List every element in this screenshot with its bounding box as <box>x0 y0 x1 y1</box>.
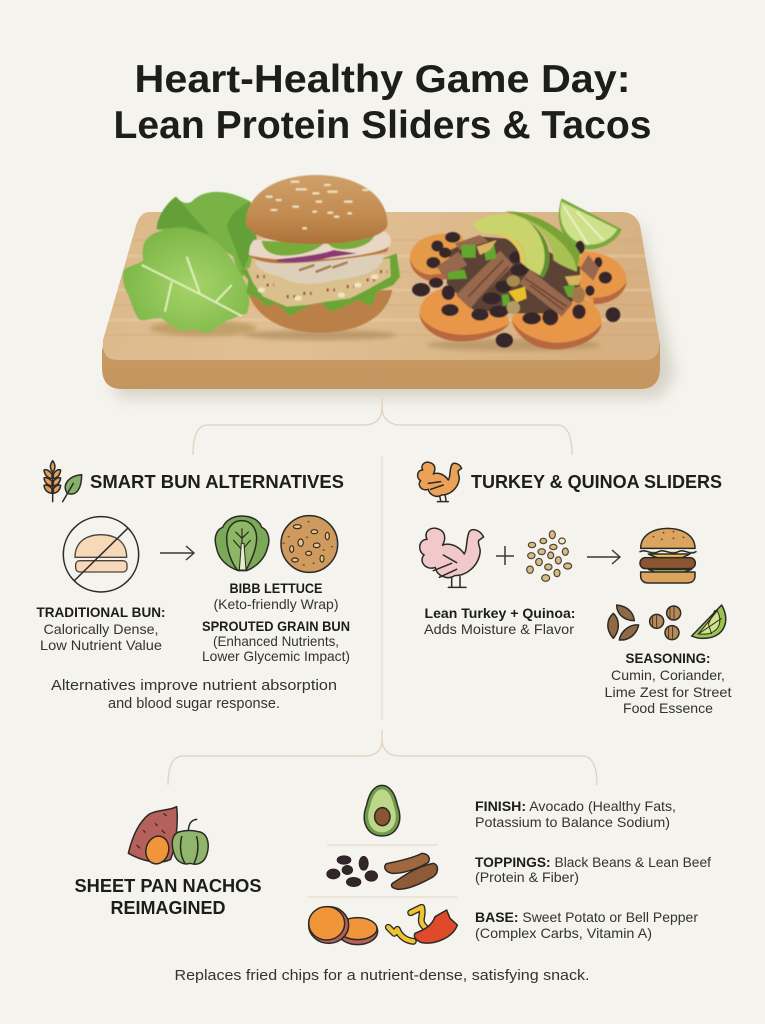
connector: to sheet pan section <box>168 730 597 785</box>
beans <box>412 232 620 348</box>
text: seasoning: Food Essence <box>623 701 713 716</box>
text: bun alternatives: (Enhanced Nutrients, <box>213 634 339 649</box>
icon: pink turkey <box>420 528 484 587</box>
wooden board <box>100 212 660 389</box>
text: finish: Potassium to Balance Sodium) <box>475 814 670 830</box>
lettuce leaf and slider <box>123 175 400 340</box>
text: lean turkey and quinoa <box>424 606 576 637</box>
heading: SMART BUN ALTERNATIVES <box>90 471 344 492</box>
sweet potato slices <box>410 233 480 282</box>
icon: sweet potato slices and peppers <box>309 907 457 945</box>
board shadow <box>110 225 675 398</box>
text: seasoning: Lime Zest for Street <box>604 685 732 700</box>
top bun <box>246 175 387 244</box>
connector: hero to top sections <box>193 398 572 455</box>
arrow <box>587 550 620 564</box>
text: alternatives note: and blood sugar response. <box>108 695 280 712</box>
icon: crossed-out traditional bun <box>63 517 139 592</box>
peppers <box>448 245 575 306</box>
sweet potato, beef, beans and avocado <box>410 198 627 351</box>
cucumber <box>262 241 323 256</box>
grilled chicken patty <box>255 255 383 284</box>
text: alternatives note: Alternatives improve nutrient absorption <box>51 677 337 694</box>
lettuce <box>157 192 257 280</box>
text: finish: FINISH: Avocado (Healthy Fats, <box>475 798 676 814</box>
food photo on wooden board <box>100 175 675 398</box>
text: base: (Complex Carbs, Vitamin A) <box>475 925 652 941</box>
text: toppings: TOPPINGS: Black Beans & Lean Beef <box>475 854 711 870</box>
icon: sweet potato and bell pepper <box>128 807 208 866</box>
text: finish <box>475 798 676 830</box>
text: bottom note: Replaces fried chips for a nutrient-dense, satisfying snack. <box>174 967 590 984</box>
text: seasoning: Cumin, Coriander, <box>611 668 725 683</box>
icon: wheat and leaf <box>44 461 82 502</box>
icon: black beans and beef <box>327 853 437 889</box>
turkey slice <box>249 230 391 262</box>
beef strips <box>437 235 599 317</box>
icon: slider burger <box>640 528 696 583</box>
text: bun alternatives: Lower Glycemic Impact) <box>202 649 350 664</box>
icon: bibb lettuce <box>215 516 269 571</box>
text: lean turkey and quinoa: Lean Turkey + Quinoa: <box>424 606 576 621</box>
avocado slices <box>505 212 580 272</box>
panel: turkey and quinoa sliders <box>418 462 732 716</box>
bottom bun <box>248 290 392 333</box>
text: traditional bun: TRADITIONAL BUN: <box>36 605 166 620</box>
icon: orange turkey <box>418 462 462 502</box>
panel: smart bun alternatives <box>36 461 350 712</box>
panel: sheet pan nachos <box>74 785 711 984</box>
lime wedge <box>559 198 622 249</box>
text: traditional bun: Calorically Dense, <box>44 622 158 637</box>
text: toppings <box>475 854 711 885</box>
text: toppings: (Protein & Fiber) <box>475 869 579 885</box>
red onion <box>277 250 357 262</box>
text: base: BASE: Sweet Potato or Bell Pepper <box>475 909 698 925</box>
text: bun alternatives: BIBB LETTUCE <box>230 581 322 596</box>
green frill <box>240 253 400 316</box>
quinoa <box>247 258 391 307</box>
heading: SHEET PAN NACHOS <box>74 876 262 896</box>
text: bun alternatives <box>202 581 350 664</box>
text: alternatives note <box>51 677 337 712</box>
text: bun alternatives: SPROUTED GRAIN BUN <box>202 619 350 634</box>
icon: quinoa grains <box>527 531 572 581</box>
divider: between top sections <box>381 456 383 720</box>
heading: REIMAGINED <box>110 898 226 918</box>
icon: avocado <box>364 785 400 836</box>
title <box>114 58 652 147</box>
text: lean turkey and quinoa: Adds Moisture & Flavor <box>424 622 574 637</box>
text: traditional bun: Low Nutrient Value <box>40 638 162 653</box>
heading <box>74 876 262 918</box>
text: base <box>475 909 698 941</box>
icon: sprouted grain bun <box>281 516 338 572</box>
title: Heart-Healthy Game Day: <box>134 58 630 101</box>
arrow <box>160 546 194 560</box>
text: seasoning: SEASONING: <box>626 651 710 666</box>
divider <box>308 845 457 897</box>
plus sign <box>496 546 514 565</box>
icon: cumin, coriander and lime <box>608 605 726 640</box>
text: seasoning <box>604 651 732 716</box>
title: Lean Protein Sliders & Tacos <box>114 104 652 147</box>
text: bun alternatives: (Keto-friendly Wrap) <box>214 597 338 612</box>
heading: TURKEY & QUINOA SLIDERS <box>471 471 722 492</box>
bean and beef pile <box>447 237 580 313</box>
text: traditional bun <box>36 605 166 653</box>
